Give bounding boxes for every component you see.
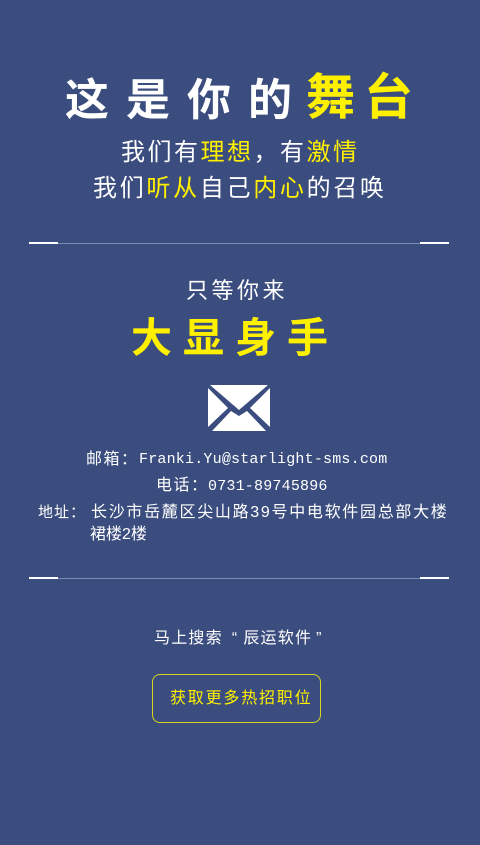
address line 2: 裙楼2楼 bbox=[90, 526, 147, 543]
search prompt: 马上搜索 “ 辰运软件” bbox=[154, 630, 323, 647]
subtitle line 1: 我们有理想，有激情 bbox=[121, 139, 360, 166]
divider bottom bbox=[29, 578, 449, 579]
address line 1: 长沙市岳麓区尖山路39号中电软件园总部大楼 bbox=[91, 504, 448, 521]
contact: phone label: 电话： bbox=[156, 477, 209, 494]
title: 这是你的 bbox=[65, 76, 309, 125]
icon: envelope bbox=[208, 385, 270, 431]
button label: 获取更多热招职位 bbox=[170, 690, 312, 707]
invitation text: 只等你来 bbox=[186, 278, 288, 303]
subtitle line 2: 我们听从自己内心的召唤 bbox=[93, 175, 387, 202]
contact: address label: 地址： bbox=[38, 504, 86, 521]
phone number: 0731-89745896 bbox=[208, 478, 328, 495]
headline: 大显身手 bbox=[131, 315, 339, 361]
divider top bbox=[29, 243, 449, 244]
email address: Franki.Yu@starlight-sms.com bbox=[139, 451, 387, 468]
title highlight: 舞台 bbox=[306, 71, 422, 125]
contact: email label: 邮箱： bbox=[86, 451, 139, 468]
button bbox=[152, 674, 321, 723]
